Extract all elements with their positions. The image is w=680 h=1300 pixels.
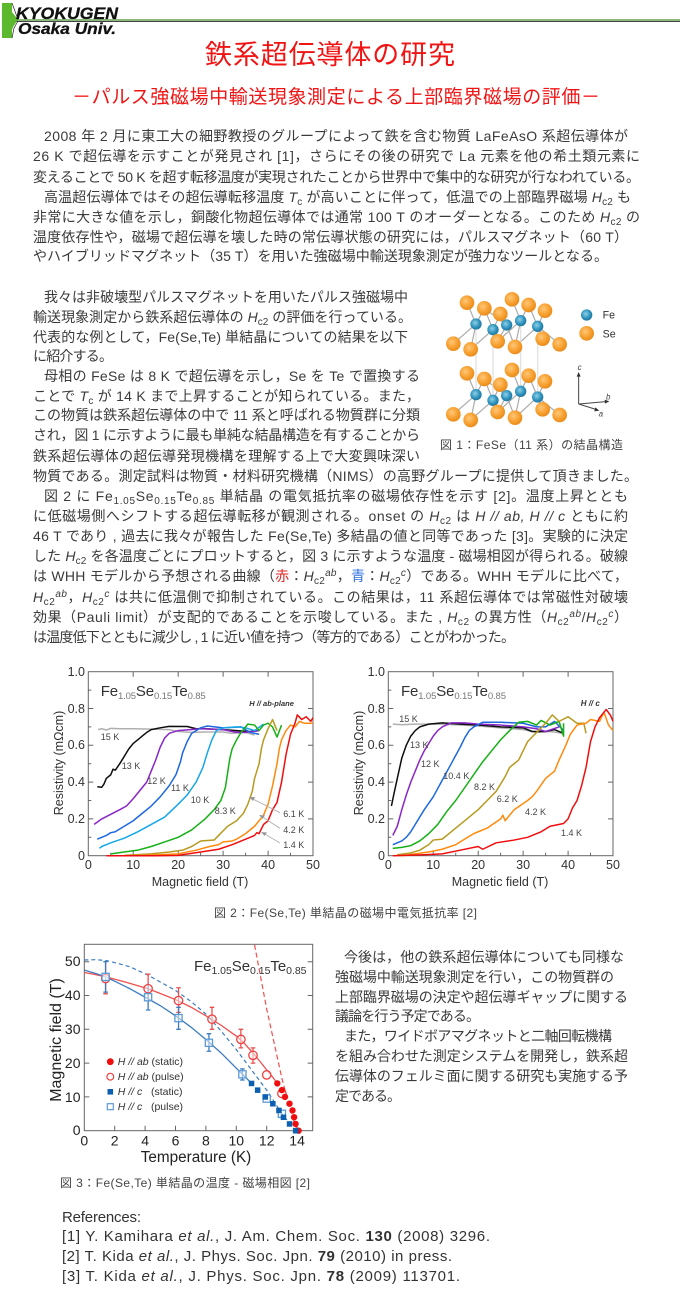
text block: future plans: 定である。 xyxy=(335,1088,401,1104)
curve annotations: 13 K xyxy=(122,761,140,771)
text block: future plans xyxy=(335,949,628,1104)
curve annotations: 8.2 K xyxy=(474,782,495,792)
chart axes and tick labels: 0 xyxy=(80,1132,88,1148)
text block: results: ab xyxy=(55,589,67,600)
curve annotations: 1.4 K xyxy=(561,828,582,838)
compound label: Fe xyxy=(401,683,418,700)
curve annotations: 15 K xyxy=(399,714,418,724)
legend xyxy=(107,1056,184,1113)
curve annotations: 10 K xyxy=(191,795,209,805)
chart axes and tick labels: Temperature (K) xyxy=(141,1149,251,1166)
text block: introduction: 温度依存性や，磁場で超伝導を壊した時の常伝導状態の研究には，パルスマグネット（60 T） xyxy=(33,229,628,245)
text block: results: c xyxy=(608,609,613,620)
text block: introduction xyxy=(33,128,640,264)
text block: results: H xyxy=(547,609,558,625)
references: [1] Y. Kamihara et al., J. Am. Chem. Soc. 130 (2008) 3296. xyxy=(62,1228,490,1245)
text block: future plans: 議論を行う予定である。 xyxy=(335,1008,480,1024)
chart axes and tick labels: 0.4 xyxy=(68,775,85,789)
compound label: Te xyxy=(472,683,488,700)
references: References: xyxy=(62,1209,141,1226)
chart axes and tick labels: Resistivity (mΩcm) xyxy=(352,711,366,815)
text block: results: に低磁場側へシフトする超伝導転移が観測される。onset の H xyxy=(33,508,439,524)
title: 鉄系超伝導体の研究 xyxy=(205,40,455,70)
chart axes and tick labels: 4 xyxy=(141,1132,149,1148)
chart axes and tick labels: 50 xyxy=(65,953,81,969)
chart axes and tick labels: 30 xyxy=(216,858,230,872)
text block: introduction: H xyxy=(592,189,603,205)
chart axes and tick labels: 0 xyxy=(378,849,385,863)
crystal structure figure xyxy=(446,292,616,427)
chart axes and tick labels: 30 xyxy=(65,1021,81,1037)
text block: introduction: 非常に大きな値を示し，銅酸化物超伝導体では通常 100 T のオーダーとなる。このため H xyxy=(33,209,610,225)
text block: pulsed magnet measurement and FeSe: 母相の FeSe は 8 K で超伝導を示し，Se を Te で置換する xyxy=(44,368,420,384)
text block: pulsed magnet measurement and FeSe: この物質は鉄系超伝導体の中で 11 系と呼ばれる物質群に分類 xyxy=(33,407,420,423)
text block: pulsed magnet measurement and FeSe: 我々は非破壊型パルスマグネットを用いたパルス強磁場中 xyxy=(44,289,408,305)
compound label: 1.05 xyxy=(211,965,232,977)
text block: pulsed magnet measurement and FeSe: 代表的な例として，Fe(Se,Te) 単結晶についての結果を以下 xyxy=(33,329,408,345)
compound label: Fe xyxy=(194,958,211,975)
legend: H // c (static) xyxy=(118,1086,182,1098)
text block: results: 単結晶 の電気抵抗率の磁場依存性を示す [2]。温度上昇ととも xyxy=(215,488,628,504)
curve annotations: 1.4 K xyxy=(283,840,304,850)
curve annotations xyxy=(101,699,304,850)
chart axes and tick labels: 40 xyxy=(261,858,275,872)
chart axes and tick labels: 14 xyxy=(289,1132,305,1148)
compound label: Se xyxy=(136,683,154,700)
compound label: 0.85 xyxy=(286,965,307,977)
logo: KYOKUGEN Osaka Univ.: Osaka Univ. xyxy=(18,21,116,38)
text block: results: c2 xyxy=(76,556,87,567)
text block: results: は温度低下とともに減少し , 1 に近い値を持つ（等方的である）ことがわかった。 xyxy=(33,629,515,645)
curve annotations: 4.2 K xyxy=(283,825,304,835)
crystal axes xyxy=(577,363,611,419)
text block: pulsed magnet measurement and FeSe: 物質である。測定試料は物質・材料研究機構（NIMS）の高野グループに提供して頂きました。 xyxy=(33,468,638,484)
legend: H // ab (static) xyxy=(118,1056,183,1068)
text block: introduction: が高いことに伴って，低温での上部臨界磁場 xyxy=(302,189,592,205)
chart axes and tick labels: 0.8 xyxy=(68,702,85,716)
fit curves and error bars xyxy=(84,945,297,1131)
crystal axes: a xyxy=(599,410,604,419)
chart axes and tick labels: 20 xyxy=(171,858,185,872)
chart axes and tick labels: 8 xyxy=(202,1132,210,1148)
curve annotations: 12 K xyxy=(421,759,440,769)
text block: results: は xyxy=(452,508,475,524)
resistivity curves xyxy=(391,709,613,856)
compound label: Se xyxy=(232,958,250,975)
chart axes and tick labels: Magnetic field (T) xyxy=(452,875,548,889)
crystal legend: Fe xyxy=(603,310,615,322)
chart axes and tick labels: 0.6 xyxy=(368,738,385,752)
subtitle: －パルス強磁場中輸送現象測定による上部臨界磁場の評価－ xyxy=(72,86,600,108)
text block: pulsed magnet measurement and FeSe: の評価を行っている。 xyxy=(268,309,412,325)
curve annotations: 6.2 K xyxy=(497,794,518,804)
text block: results: H xyxy=(33,589,44,605)
text block: results: c xyxy=(401,568,406,579)
text block: results: c xyxy=(104,589,109,600)
caption: figure 1: 図 1：FeSe（11 系）の結晶構造 xyxy=(440,438,623,452)
text block: results: ab xyxy=(569,609,581,620)
text block: pulsed magnet measurement and FeSe: に紹介する。 xyxy=(33,348,113,364)
markers: H // c pulse xyxy=(102,973,286,1117)
text block: results: ab xyxy=(325,568,337,579)
curve annotations: 11 K xyxy=(171,783,189,793)
text block: results: ， xyxy=(337,568,351,584)
text block: results: c2 xyxy=(314,576,325,587)
chart axes and tick labels: Magnetic field (T) xyxy=(48,978,65,1102)
text block: pulsed magnet measurement and FeSe: 輸送現象測定から鉄系超伝導体の H xyxy=(33,309,258,325)
compound label: 0.85 xyxy=(188,691,206,702)
text block: future plans: また，ワイドボアマグネットと二軸回転機構 xyxy=(344,1028,612,1044)
compound label: 1.05 xyxy=(118,691,136,702)
curve annotations: 6.1 K xyxy=(283,809,304,819)
chart axes and tick labels: 10 xyxy=(426,858,440,872)
text block: results: の異方性（ xyxy=(470,609,546,625)
chart axes and tick labels: 30 xyxy=(516,858,530,872)
curve annotations: 15 K xyxy=(101,732,119,742)
text block: introduction: やハイブリッドマグネット（35 T）を用いた強磁場中輸送現象測定が強力なツールとなる。 xyxy=(33,248,608,264)
text block: results: ） xyxy=(614,609,628,625)
text block: results: ）である。WHH モデルに比べて， xyxy=(406,568,628,584)
text block: results: Se xyxy=(136,488,154,504)
chart: resistivity vs field, H // c xyxy=(352,665,620,889)
chart axes and tick labels: 0.6 xyxy=(68,738,85,752)
compound label: 1.05 xyxy=(418,691,436,702)
chart axes and tick labels: Resistivity (mΩcm) xyxy=(52,711,66,815)
chart axes and tick labels: 6 xyxy=(172,1132,180,1148)
text block: results: した H xyxy=(33,548,75,564)
chart axes and tick labels: 10 xyxy=(229,1132,244,1148)
text block: results: H xyxy=(586,609,597,625)
text block: pulsed magnet measurement and FeSe: ことで T xyxy=(33,388,88,404)
markers: H // ab static xyxy=(274,1080,302,1134)
text block: results: c2 xyxy=(93,597,104,608)
text block: results: c2 xyxy=(44,597,55,608)
text block: results: H xyxy=(82,589,93,605)
legend: H // c (pulse) xyxy=(118,1101,183,1113)
text block: results: 46 T であり , 過去に我々が報告した Fe(Se,Te) 多結晶の値と同等であった [3]。実験的に決定 xyxy=(33,528,628,544)
text block: future plans: 強磁場中輸送現象測定を行い，この物質群の xyxy=(335,969,614,985)
chart axes and tick labels: 0.2 xyxy=(368,812,385,826)
chart axes and tick labels: 0 xyxy=(385,858,392,872)
text block: pulsed magnet measurement and FeSe: され，図 1 に示すように最も単純な結晶構造を有することから xyxy=(33,427,420,443)
text block: results: 効果（Pauli limit）が支配的であることを示唆している。また , H xyxy=(33,609,457,625)
chart axes and tick labels: 0 xyxy=(78,849,85,863)
caption: figure 2: 図 2：Fe(Se,Te) 単結晶の磁場中電気抵抗率 [2] xyxy=(214,905,477,920)
logo: KYOKUGEN Osaka Univ. xyxy=(2,3,680,38)
text block: results xyxy=(33,488,628,645)
chart axes and tick labels: 0.4 xyxy=(368,775,385,789)
compound label: 0.85 xyxy=(488,691,506,702)
compound label: 0.15 xyxy=(154,691,172,702)
chart axes and tick labels xyxy=(52,665,320,889)
crystal atoms and bonds xyxy=(446,292,567,427)
crystal axes: b xyxy=(606,392,611,401)
caption: figure 3: 図 3：Fe(Se,Te) 単結晶の温度 - 磁場相図 [2] xyxy=(60,1176,310,1190)
compound label: Te xyxy=(172,683,188,700)
text block: introduction: 2008 年 2 月に東工大の細野教授のグループによって鉄を含む物質 LaFeAsO 系超伝導体が xyxy=(44,128,628,144)
references xyxy=(62,1209,490,1285)
chart axes and tick labels: 1.0 xyxy=(368,665,385,679)
curve annotations: H // ab-plane xyxy=(249,699,294,708)
text block: pulsed magnet measurement and FeSe: c2 xyxy=(258,317,269,328)
text block: results: H // ab, H // c ともに約 xyxy=(475,508,628,524)
text block: results: Te xyxy=(177,488,192,504)
curve annotations: 4.2 K xyxy=(525,807,546,817)
markers: H // c static xyxy=(249,1081,298,1134)
compound label: 0.15 xyxy=(454,691,472,702)
chart axes and tick labels: 40 xyxy=(65,987,81,1003)
chart: resistivity vs field, H // ab-plane xyxy=(52,665,320,889)
chart axes and tick labels xyxy=(48,944,313,1166)
text block: introduction: 高温超伝導体ではその超伝導転移温度 T xyxy=(44,189,297,205)
text block: results: は共に低温側で抑制されている。この結果は，11 系超伝導体では常磁性対破壊 xyxy=(110,589,628,605)
text block: results: c2 xyxy=(458,617,469,628)
text block: pulsed magnet measurement and FeSe: が 14 K まで上昇することが知られている。また， xyxy=(94,388,420,404)
text block: results: c2 xyxy=(440,516,452,527)
chart axes and tick labels: Magnetic field (T) xyxy=(152,875,248,889)
curve annotations: 10.4 K xyxy=(443,771,469,781)
chart axes and tick labels: 2 xyxy=(111,1132,119,1148)
text block: results: c2 xyxy=(597,617,608,628)
text block: results: 図 2 に Fe xyxy=(44,488,113,504)
text block: results: 0.85 xyxy=(193,496,215,507)
text block: results: ， xyxy=(68,589,82,605)
text block: future plans: 今後は，他の鉄系超伝導体についても同様な xyxy=(344,949,624,965)
resistivity curves xyxy=(94,715,313,856)
text block: results: c2 xyxy=(390,576,401,587)
chart axes and tick labels: 0 xyxy=(85,858,92,872)
curve annotations xyxy=(399,699,600,838)
text block: introduction: も xyxy=(613,189,631,205)
text block: results: 0.15 xyxy=(154,496,176,507)
text block: pulsed magnet measurement and FeSe: 鉄系超伝導体の超伝導発現機構を理解する上で大変興味深い xyxy=(33,448,420,464)
text block: introduction: c2 xyxy=(610,217,622,228)
chart axes and tick labels: 20 xyxy=(65,1055,81,1071)
curve annotations: H // c xyxy=(581,699,600,708)
text block: results: は WHH モデルから予想される曲線（赤：H xyxy=(33,568,314,584)
text block: introduction: 変えることで 50 K を超す転移温度が実現されたことから世界中で集中的な研究が行なわれている。 xyxy=(33,169,640,185)
curve annotations: 12 K xyxy=(147,776,166,786)
text block: pulsed magnet measurement and FeSe: c xyxy=(88,396,93,407)
legend: H // ab (pulse) xyxy=(118,1071,184,1083)
chart axes and tick labels: 20 xyxy=(471,858,485,872)
text block: pulsed magnet measurement and FeSe xyxy=(33,289,638,484)
chart axes and tick labels: 10 xyxy=(126,858,140,872)
crystal axes: c xyxy=(578,363,582,372)
chart axes and tick labels xyxy=(352,665,620,889)
crystal legend: Se xyxy=(603,328,616,340)
curve annotations: 13 K xyxy=(410,740,429,750)
references: [3] T. Kida et al., J. Phys. Soc. Jpn. 78 (2009) 113701. xyxy=(62,1268,460,1285)
logo: KYOKUGEN Osaka Univ.: KYOKUGEN xyxy=(16,4,119,23)
text block: results: を各温度ごとにプロットすると，図 3 に示すような温度 - 磁場相図が得られる。破線 xyxy=(86,548,628,564)
text block: introduction: 26 K で超伝導を示すことが発見され [1]，さらにその後の研究で La 元素を他の希土類元素に xyxy=(33,148,640,164)
compound label: 0.15 xyxy=(250,965,271,977)
text block: results: 青：H xyxy=(351,568,390,584)
text block: results: c2 xyxy=(558,617,569,628)
chart axes and tick labels: 0.8 xyxy=(368,702,385,716)
compound label: Te xyxy=(270,958,286,975)
text block: results: / xyxy=(582,609,586,625)
chart axes and tick labels: 50 xyxy=(606,858,620,872)
text block: results: 1.05 xyxy=(113,496,135,507)
text block: future plans: を組み合わせた測定システムを開発し，鉄系超 xyxy=(335,1048,628,1064)
chart: temperature-field phase diagram xyxy=(48,944,313,1166)
crystal legend xyxy=(579,309,616,341)
chart axes and tick labels: 40 xyxy=(561,858,575,872)
text block: future plans: 伝導体のフェルミ面に関する研究も実施する予 xyxy=(335,1068,628,1084)
text block: future plans: 上部臨界磁場の決定や超伝導ギャップに関する xyxy=(335,989,628,1005)
chart axes and tick labels: 0 xyxy=(73,1122,81,1138)
text block: introduction: の xyxy=(622,209,640,225)
chart axes and tick labels: 1.0 xyxy=(68,665,85,679)
chart axes and tick labels: 0.2 xyxy=(68,812,85,826)
compound label: Se xyxy=(436,683,454,700)
chart axes and tick labels: 12 xyxy=(259,1132,275,1148)
compound label: Fe xyxy=(101,683,118,700)
chart axes and tick labels: 50 xyxy=(306,858,320,872)
references: [2] T. Kida et al., J. Phys. Soc. Jpn. 79 (2010) in press. xyxy=(62,1248,452,1265)
text block: introduction: c xyxy=(297,197,302,208)
text block: introduction: c2 xyxy=(602,197,613,208)
chart axes and tick labels: 10 xyxy=(65,1089,81,1105)
markers: H // ab pulse xyxy=(101,974,286,1098)
curve annotations: 8.3 K xyxy=(215,806,236,816)
